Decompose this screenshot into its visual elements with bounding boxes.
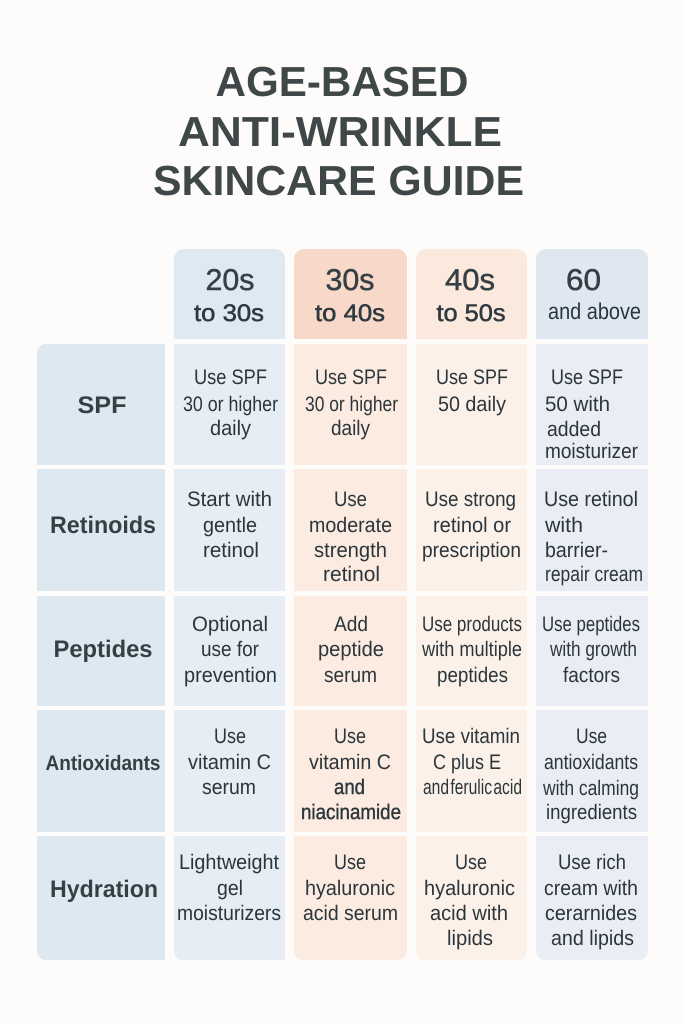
- Antioxidants, 40s: Use vitamin: [422, 725, 520, 748]
- row label: Retinoids: Retinoids: [50, 512, 156, 539]
- title: [153, 58, 524, 204]
- Retinoids, 30s: [294, 469, 407, 591]
- row label: Hydration: Hydration: [50, 876, 158, 903]
- SPF, 20s: [174, 344, 285, 465]
- Hydration, 20s: Lightweight: [179, 851, 279, 874]
- Peptides, 60+: Use peptides: [542, 613, 640, 636]
- Peptides, 60+: [536, 596, 648, 706]
- Retinoids, 60+: repair cream: [545, 563, 643, 586]
- Antioxidants, 30s: niacinamide: [301, 801, 401, 824]
- Retinoids, 20s: Start with: [187, 488, 272, 511]
- header: 30s to 40s: 30s: [326, 264, 374, 297]
- Peptides, 20s: Optional: [192, 613, 268, 636]
- Peptides, 30s: [294, 596, 407, 706]
- Peptides, 60+: with growth: [549, 638, 637, 661]
- Antioxidants, 20s: [174, 710, 285, 832]
- SPF, 60+: moisturizer: [545, 440, 638, 463]
- SPF, 30s: 30 or higher: [305, 393, 398, 416]
- Hydration, 30s: acid serum: [303, 902, 398, 925]
- Peptides, 40s: [416, 596, 527, 706]
- Antioxidants, 60+: with calming: [542, 777, 639, 800]
- SPF, 20s: 30 or higher: [183, 393, 278, 416]
- Hydration, 30s: Use: [334, 851, 366, 874]
- Antioxidants, 30s: vitamin C: [309, 751, 391, 774]
- row label: Hydration: [37, 836, 165, 960]
- Hydration, 60+: [536, 836, 648, 960]
- header: 60 and above: and above: [548, 298, 641, 324]
- Retinoids, 20s: gentle: [203, 514, 257, 537]
- Hydration, 30s: hyaluronic: [305, 877, 395, 900]
- Antioxidants, 30s: and: [334, 776, 365, 799]
- SPF, 30s: daily: [331, 417, 370, 440]
- Retinoids, 30s: retinol: [323, 563, 380, 586]
- SPF, 60+: Use SPF: [551, 366, 623, 389]
- Hydration, 40s: lipids: [447, 927, 493, 950]
- header: 60 and above: [536, 249, 648, 339]
- Hydration, 60+: cream with: [544, 877, 638, 900]
- SPF, 60+: 50 with: [545, 393, 610, 416]
- Retinoids, 20s: retinol: [203, 539, 259, 562]
- SPF, 40s: Use SPF: [436, 366, 508, 389]
- SPF, 30s: Use SPF: [315, 366, 387, 389]
- row label: Antioxidants: Antioxidants: [46, 752, 160, 775]
- Retinoids, 60+: Use retinol: [544, 488, 638, 511]
- Retinoids, 30s: strength: [314, 539, 387, 562]
- header: 20s to 30s: to 30s: [194, 300, 264, 327]
- Peptides, 30s: peptide: [318, 638, 384, 661]
- SPF, 20s: daily: [210, 417, 251, 440]
- Antioxidants, 20s: serum: [202, 776, 256, 799]
- header: 40s to 50s: [416, 249, 527, 339]
- header: 40s to 50s: to 50s: [436, 300, 506, 327]
- row label: SPF: [37, 344, 165, 465]
- SPF, 20s: Use SPF: [194, 366, 267, 389]
- Hydration, 60+: cerarnides: [545, 902, 637, 925]
- Hydration, 40s: hyaluronic: [424, 877, 515, 900]
- Hydration, 20s: [174, 836, 285, 960]
- Hydration, 40s: Use: [455, 851, 487, 874]
- Hydration, 60+: and lipids: [551, 927, 634, 950]
- SPF, 40s: 50 daily: [438, 393, 506, 416]
- Hydration, 40s: acid with: [430, 902, 508, 925]
- SPF, 60+: added: [547, 418, 601, 441]
- Peptides, 40s: with multiple: [421, 638, 522, 661]
- Peptides, 40s: peptides: [437, 664, 508, 687]
- Hydration, 60+: Use rich: [558, 851, 626, 874]
- Retinoids, 30s: Use: [334, 488, 367, 511]
- header: 20s to 30s: 20s: [206, 264, 254, 297]
- Peptides, 30s: Add: [334, 613, 368, 636]
- title: SKINCARE GUIDE: [153, 157, 524, 204]
- Peptides, 60+: factors: [563, 664, 620, 687]
- Hydration, 30s: [294, 836, 407, 960]
- Retinoids, 40s: [416, 469, 527, 591]
- header: 40s to 50s: 40s: [445, 264, 495, 297]
- title: AGE-BASED: [216, 58, 468, 105]
- Hydration, 20s: moisturizers: [177, 902, 281, 925]
- Retinoids, 30s: moderate: [309, 514, 392, 537]
- Retinoids, 60+: barrier-: [545, 539, 608, 562]
- row label: Antioxidants: [37, 710, 165, 832]
- Hydration, 20s: gel: [217, 877, 243, 900]
- row label: Retinoids: [37, 469, 165, 591]
- Antioxidants, 40s: and ferulic acid: [423, 776, 522, 799]
- Antioxidants, 20s: Use: [214, 725, 246, 748]
- Antioxidants, 60+: antioxidants: [544, 751, 638, 774]
- SPF, 40s: [416, 344, 527, 465]
- row label: SPF: SPF: [78, 392, 126, 419]
- Peptides, 20s: prevention: [184, 664, 277, 687]
- SPF, 30s: [294, 344, 407, 465]
- Antioxidants, 40s: [416, 710, 527, 832]
- header: 20s to 30s: [174, 249, 285, 339]
- Hydration, 40s: [416, 836, 527, 960]
- header: 30s to 40s: [294, 249, 407, 339]
- header: 60 and above: 60: [566, 264, 601, 297]
- Antioxidants, 30s: Use: [334, 725, 366, 748]
- row label: Peptides: Peptides: [54, 636, 152, 663]
- title: ANTI-WRINKLE: [178, 108, 502, 155]
- Retinoids, 40s: prescription: [422, 539, 521, 562]
- Retinoids, 60+: with: [544, 514, 583, 537]
- Retinoids, 40s: Use strong: [425, 488, 516, 511]
- Antioxidants, 60+: Use: [576, 725, 607, 748]
- header: 30s to 40s: to 40s: [315, 300, 385, 327]
- Antioxidants, 30s: [294, 710, 407, 832]
- Antioxidants, 60+: ingredients: [546, 801, 637, 824]
- Antioxidants, 40s: C plus E: [433, 751, 501, 774]
- Retinoids, 60+: [536, 469, 648, 591]
- Antioxidants, 60+: [536, 710, 648, 832]
- Peptides, 20s: [174, 596, 285, 706]
- SPF, 60+: [536, 344, 648, 465]
- row label: Peptides: [37, 596, 165, 706]
- Peptides, 40s: Use products: [422, 613, 522, 636]
- Peptides, 20s: use for: [201, 638, 259, 661]
- Retinoids, 40s: retinol or: [433, 514, 511, 537]
- Peptides, 30s: serum: [324, 664, 377, 687]
- Retinoids, 20s: [174, 469, 285, 591]
- Antioxidants, 20s: vitamin C: [188, 751, 271, 774]
